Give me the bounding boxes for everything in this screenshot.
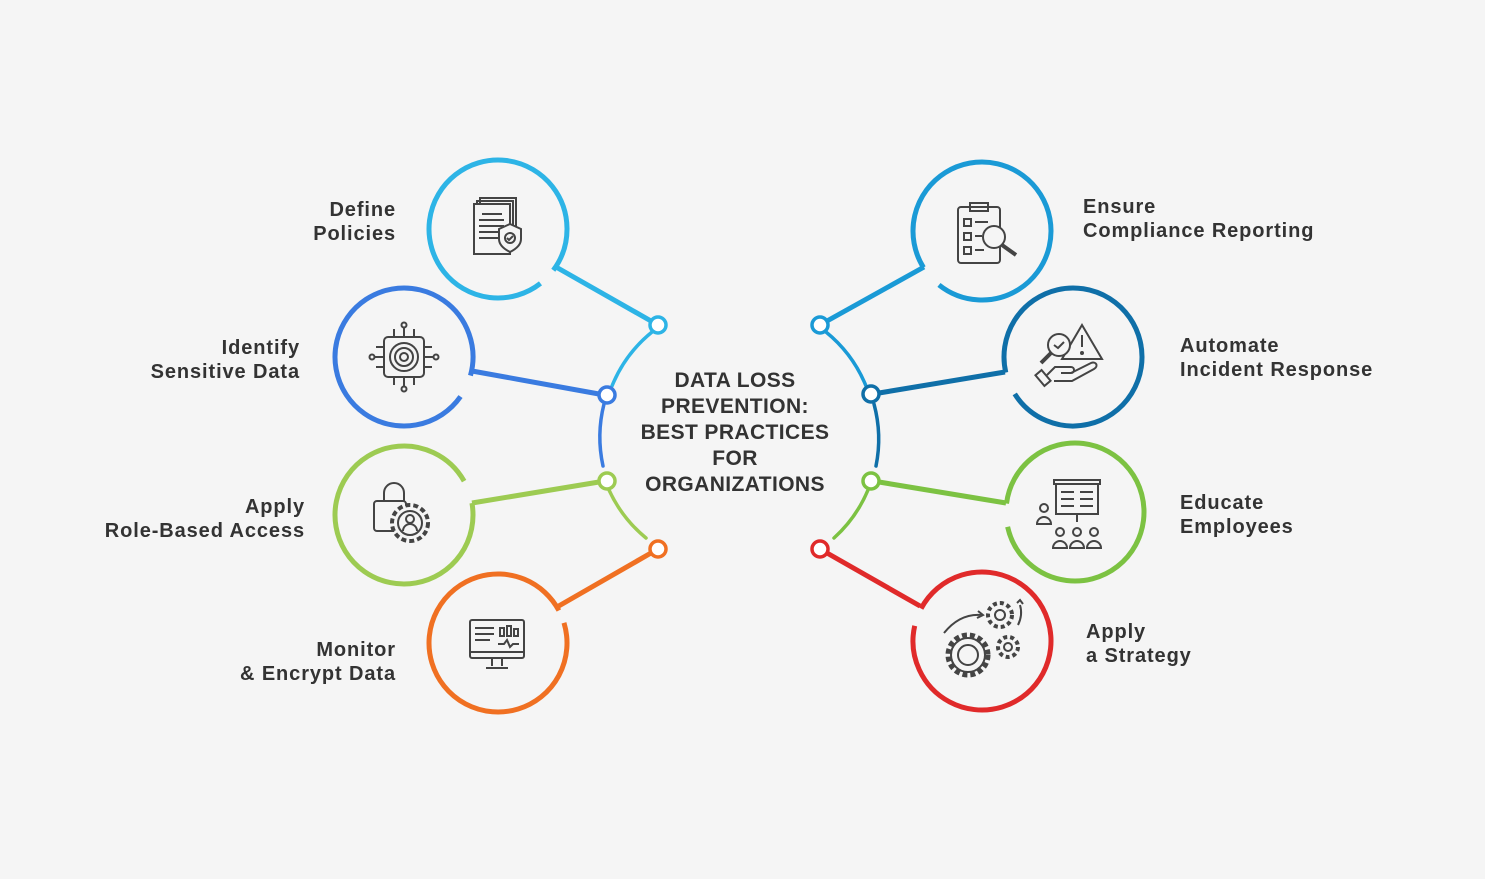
item: Define Policies circle xyxy=(401,132,666,333)
label: Educate Employees: Educate xyxy=(1180,492,1264,514)
icon: gears xyxy=(944,600,1023,675)
label: Educate Employees xyxy=(1180,492,1294,538)
title: FOR xyxy=(712,447,758,470)
label: Define Policies: Policies xyxy=(313,223,396,245)
icon: fingerprint circuit xyxy=(370,322,438,392)
label: Apply a Strategy xyxy=(1086,621,1192,667)
icon: magnifier alert hand xyxy=(1035,325,1102,386)
label: Apply Role-Based Access xyxy=(105,496,305,542)
icon: lock with gear user xyxy=(374,483,428,541)
item: Automate circle xyxy=(863,274,1156,440)
label: Apply Role-Based Access: Role-Based Access xyxy=(105,520,305,542)
label: Monitor & Encrypt Data: Monitor xyxy=(316,639,396,661)
label: Ensure Compliance Reporting: Compliance Reporting xyxy=(1083,220,1314,242)
label: Monitor & Encrypt Data: & Encrypt Data xyxy=(240,663,396,685)
title: BEST PRACTICES xyxy=(641,421,829,444)
icon: policy documents xyxy=(474,198,521,254)
icon: presentation people xyxy=(1037,480,1101,548)
label: Automate Incident Response: Incident Response xyxy=(1180,359,1373,381)
title: PREVENTION: xyxy=(661,395,809,418)
label: Automate Incident Response xyxy=(1180,335,1373,381)
label: Identify Sensitive Data: Identify xyxy=(222,337,300,359)
icon: monitor xyxy=(470,620,524,668)
item: Educate circle xyxy=(863,435,1152,589)
label: Automate Incident Response: Automate xyxy=(1180,335,1279,357)
label: Ensure Compliance Reporting: Ensure xyxy=(1083,196,1156,218)
title xyxy=(641,369,829,496)
item: Identify circle xyxy=(308,261,615,453)
title: ORGANIZATIONS xyxy=(645,473,825,496)
label: Monitor & Encrypt Data xyxy=(240,639,396,685)
title: DATA LOSS xyxy=(674,369,796,392)
icon: clipboard with magnifier xyxy=(958,203,1016,263)
item: Apply Role circle xyxy=(324,435,615,595)
label: Define Policies: Define xyxy=(329,199,396,221)
label: Identify Sensitive Data xyxy=(151,337,300,383)
label: Define Policies xyxy=(313,199,396,245)
item: Strategy circle xyxy=(812,541,1075,734)
item: Ensure circle xyxy=(812,136,1077,333)
label: Apply Role-Based Access: Apply xyxy=(245,496,305,518)
label: Identify Sensitive Data: Sensitive Data xyxy=(151,361,300,383)
label: Apply a Strategy: Apply xyxy=(1086,621,1146,643)
label: Ensure Compliance Reporting xyxy=(1083,196,1314,242)
connector arcs left xyxy=(600,332,879,538)
label: Educate Employees: Employees xyxy=(1180,516,1294,538)
label: Apply a Strategy: a Strategy xyxy=(1086,645,1192,667)
item: Monitor circle xyxy=(412,541,666,729)
